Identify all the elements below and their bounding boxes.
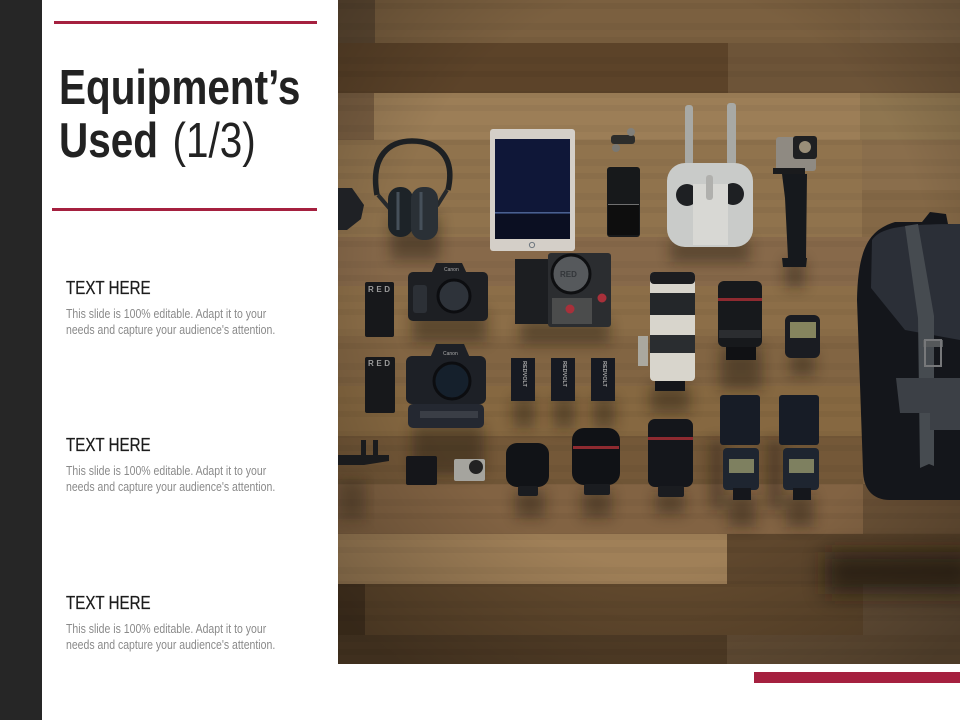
batteries: REDVOLT: [601, 361, 607, 388]
smartphone: [607, 167, 640, 237]
remote trigger: [785, 315, 820, 358]
photo: camera equipment flat lay on wooden floor: [338, 0, 960, 664]
DSLR camera top: [408, 263, 488, 321]
bottom right red bar: [754, 672, 960, 683]
text block 1: TEXT HERE: [66, 278, 151, 298]
lower red rule: [52, 208, 317, 211]
speedlite flashes: [720, 395, 819, 500]
text block 3: [66, 593, 275, 652]
RED plates: [365, 282, 395, 413]
action camera on grip: [773, 136, 817, 267]
text block 1: [66, 278, 275, 337]
DSLR camera with grip: [406, 344, 486, 428]
tablet: [490, 129, 575, 251]
zoom lens top right: [718, 281, 762, 360]
DSLR camera with grip: Canon: [443, 351, 458, 357]
text block 2: needs and capture your audience's attention.: [66, 480, 275, 494]
headphones: [376, 141, 450, 240]
small mount: [611, 128, 635, 152]
batteries: REDVOLT: [521, 361, 527, 388]
batteries: REDVOLT: [561, 361, 567, 388]
batteries: [511, 358, 615, 401]
text block 2: TEXT HERE: [66, 435, 151, 455]
RED plates: RED: [368, 359, 390, 368]
text block 1: needs and capture your audience's attention.: [66, 323, 275, 337]
backpack: [857, 212, 960, 500]
text block 1: This slide is 100% editable. Adapt it to your: [66, 307, 266, 321]
bottom lenses: [506, 419, 693, 497]
left dark sidebar: [0, 0, 42, 720]
soft shadows under the equipment: [390, 215, 815, 527]
text block 3: This slide is 100% editable. Adapt it to your: [66, 622, 266, 636]
cinema camera: RED: [560, 270, 577, 279]
DSLR camera top: Canon: [444, 267, 459, 273]
title: Equipment’s: [59, 61, 300, 115]
text block 3: TEXT HERE: [66, 593, 151, 613]
title: Used (1/3): [59, 114, 256, 168]
text block 2: [66, 435, 275, 494]
cinema camera: [515, 253, 611, 327]
wooden planks: [338, 0, 960, 664]
white telephoto lens: [638, 272, 695, 391]
drone controller: [667, 103, 753, 247]
text block 3: needs and capture your audience's attention.: [66, 638, 275, 652]
title: [59, 61, 300, 168]
RED plates: RED: [368, 285, 390, 294]
left edge object: [338, 188, 364, 230]
top red rule: [54, 21, 317, 24]
rail accessory, cube and action camera: [338, 440, 485, 485]
text block 2: This slide is 100% editable. Adapt it to your: [66, 464, 266, 478]
